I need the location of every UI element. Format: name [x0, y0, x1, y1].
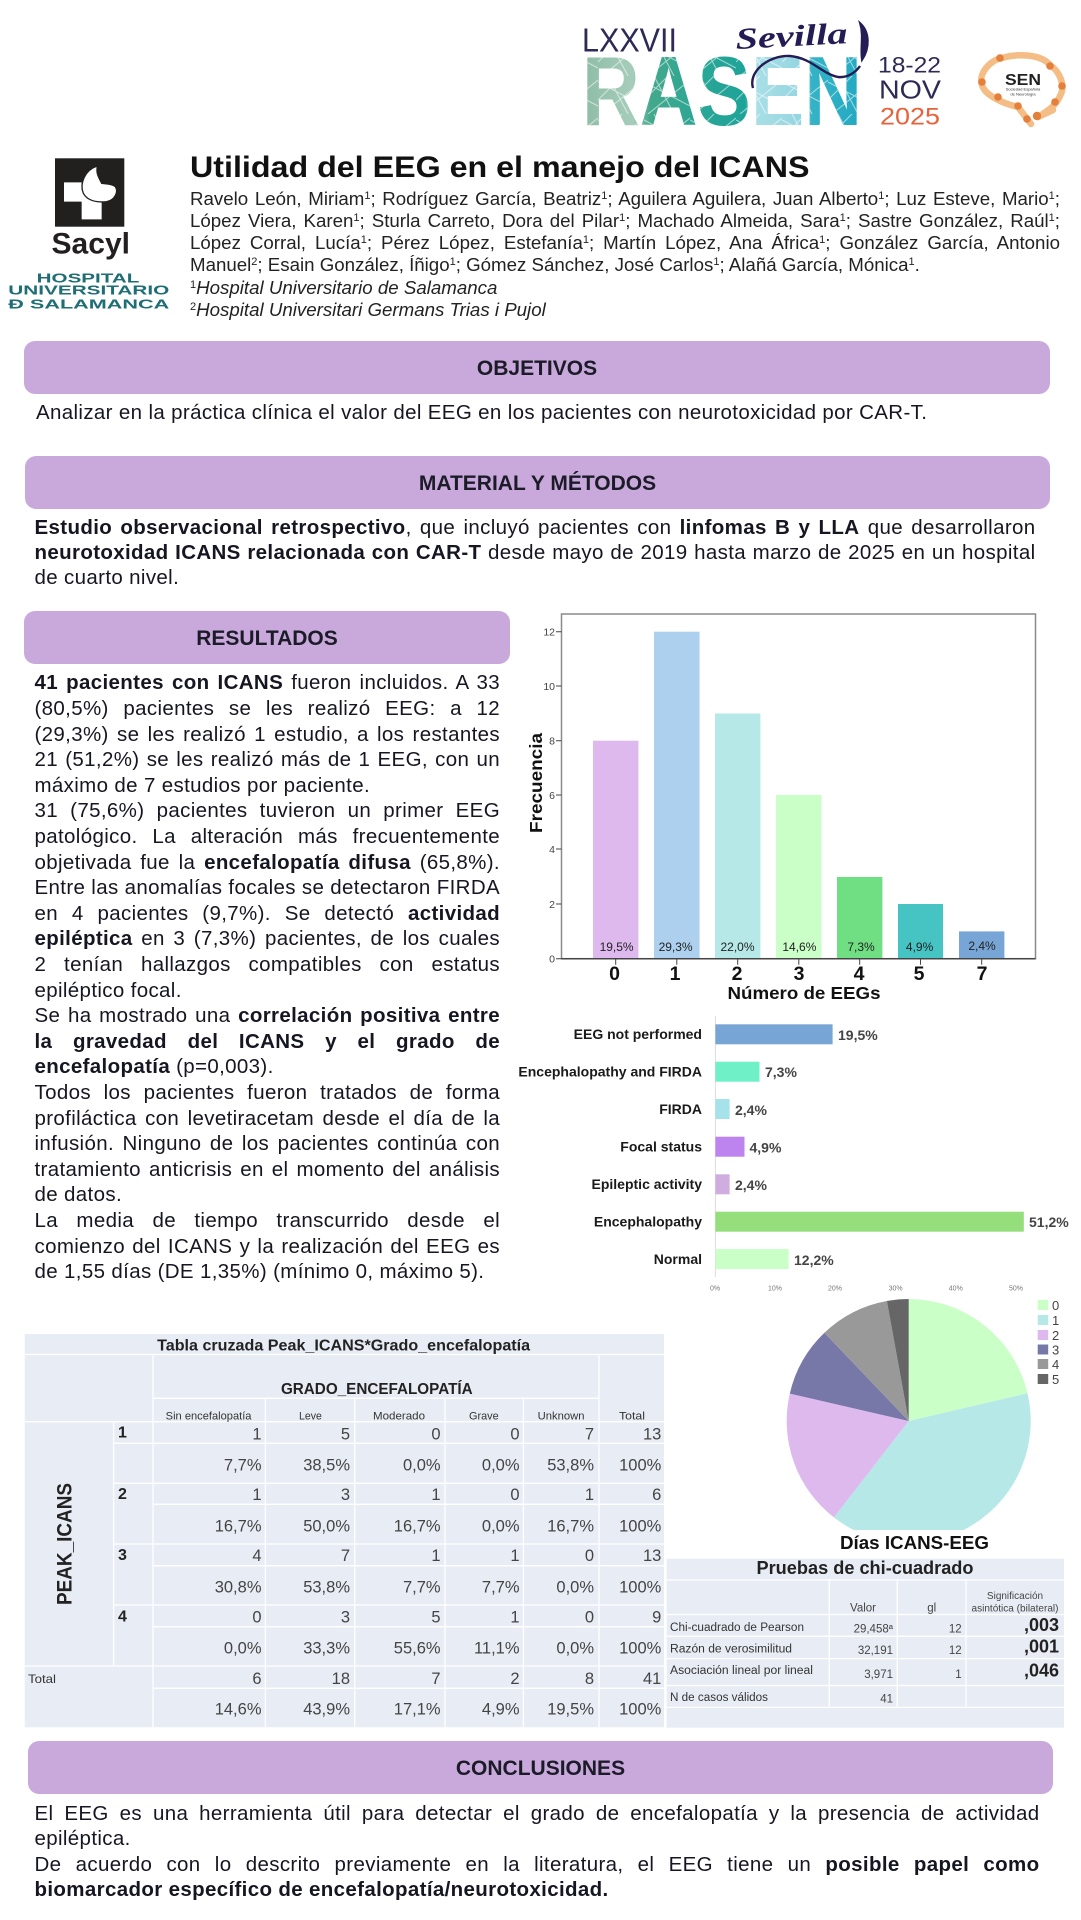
logo: Sacyl Hospital Universitario de Salamanca: HOSPITAL [37, 271, 139, 286]
authors and affiliations [190, 188, 1060, 320]
value labels: 2,4% [735, 1177, 767, 1193]
table values: 0 [510, 1425, 520, 1443]
column headers: Unknown [538, 1410, 584, 1422]
bars [593, 632, 1004, 959]
text: conclusiones: El EEG es una herramienta útil para detectar el grado de encefalopatía y la presencia de actividad [34, 1802, 1040, 1825]
x axis labels: 40% [949, 1286, 963, 1292]
table values: 18 [332, 1670, 350, 1688]
table values: 1 [431, 1547, 441, 1565]
x axis tick labels [609, 963, 987, 985]
bar chart: EEG findings [518, 1016, 1069, 1292]
x axis labels: 10% [768, 1286, 782, 1292]
logo: SEN brain: de Neurología [1010, 92, 1036, 96]
table values: 6 [652, 1486, 661, 1504]
x axis labels: 30% [889, 1286, 903, 1292]
logo: Sacyl Hospital Universitario de Salamanca [8, 158, 170, 311]
heading: conclusiones: CONCLUSIONES [456, 1757, 625, 1780]
percentage labels: 7,3% [847, 940, 875, 954]
table values: 38,5% [303, 1457, 350, 1475]
logo: SEN brain [978, 52, 1066, 128]
text: resultados: patológico. La alteración más frecuentemente [34, 825, 500, 848]
text: resultados [34, 671, 500, 1283]
text: conclusiones [34, 1802, 1040, 1901]
text: resultados: La media de tiempo transcurrido desde el [34, 1209, 500, 1232]
value labels: 7,3% [765, 1064, 797, 1080]
percentage labels: 29,3% [659, 940, 693, 954]
table: tabla cruzada Peak_ICANS por grado de encefalopatía [24, 1334, 664, 1728]
table values: 13 [643, 1547, 661, 1565]
row labels: 2 [118, 1486, 127, 1503]
heading: resultados: RESULTADOS [196, 627, 338, 650]
text: material y métodos [34, 516, 1036, 589]
text: resultados: infusión. Ninguno de los pacientes continúa con [34, 1132, 500, 1155]
y axis tick labels: 0 [549, 954, 555, 966]
text: resultados: profiláctica con levetiracetam desde el día de la [34, 1107, 500, 1130]
row labels [670, 1622, 813, 1704]
table values: 1 [510, 1609, 520, 1627]
value labels: 19,5% [838, 1027, 878, 1043]
x axis tick labels: 3 [794, 963, 805, 985]
percentage labels: 4,9% [906, 940, 934, 954]
table values: 30,8% [215, 1579, 262, 1597]
legend: 2 [1052, 1328, 1059, 1343]
table title: Tabla cruzada Peak_ICANS*Grado_encefalopatía [157, 1338, 530, 1354]
text: resultados: (80,5%) pacientes se les realizó EEG: a 12 [34, 697, 500, 720]
category labels: Normal [654, 1251, 702, 1267]
logo: LXXVII RASEN Sevilla 18-22 NOV 2025: Sevilla [735, 17, 848, 56]
row labels: 3 [118, 1547, 127, 1564]
table values: 0,0% [482, 1518, 520, 1536]
text: resultados: Se ha mostrado una correlación positiva entre [34, 1004, 500, 1027]
table values: 9 [652, 1609, 661, 1627]
column headers [166, 1410, 645, 1422]
text: resultados: de 1,55 días (DE 1,35%) (mínimo 0, máximo 5). [34, 1260, 484, 1283]
percentage labels: 2,4% [968, 939, 996, 953]
table values: 16,7% [394, 1518, 441, 1536]
values: 32,191 [858, 1645, 893, 1657]
percentage labels: 19,5% [600, 940, 634, 954]
column headers: asintótica (bilateral) [972, 1604, 1058, 1615]
legend: 1 [1052, 1313, 1059, 1328]
authors and affiliations: 1Hospital Universitario de Salamanca [190, 277, 497, 298]
pie slices [787, 1299, 1031, 1543]
column headers: gl [927, 1603, 936, 1615]
bars [715, 1024, 1024, 1269]
table values: 0,0% [556, 1579, 594, 1597]
table values: 0 [585, 1609, 594, 1627]
legend: 3 [1052, 1342, 1059, 1358]
values: 12 [949, 1645, 962, 1657]
table values: 16,7% [547, 1518, 594, 1536]
table values: 53,8% [303, 1579, 350, 1597]
table values: 6 [252, 1670, 262, 1688]
row axis label: PEAK_ICANS [54, 1483, 76, 1605]
logo: Sacyl Hospital Universitario de Salamanca: UNIVERSITARIO [8, 282, 169, 298]
value labels [735, 1027, 1069, 1268]
text: resultados: 31 (75,6%) pacientes tuvieron un primer EEG [34, 799, 500, 822]
value labels: 51,2% [1029, 1214, 1069, 1230]
authors and affiliations: López Viera, Karen1; Sturla Carreto, Dora del Pilar1; Machado Almeida, Sara1; Sastre González, Raúl1; [190, 210, 1060, 231]
text: resultados: 2 tenían hallazgos compatibles con estatus [34, 953, 500, 976]
logo: LXXVII RASEN Sevilla 18-22 NOV 2025: NOV [879, 76, 941, 104]
x axis tick labels: 4 [854, 963, 865, 985]
table values: 55,6% [394, 1639, 441, 1657]
x axis labels: 0% [710, 1286, 720, 1292]
table values: 0 [585, 1547, 594, 1565]
authors and affiliations: 2Hospital Universitari Germans Trias i Pujol [190, 299, 546, 320]
heading: resultados [24, 611, 510, 664]
table values: 2 [510, 1670, 520, 1688]
table values: 100% [619, 1639, 662, 1657]
text: resultados: (29,3%) se les realizó 1 estudio, a los restantes [34, 723, 500, 746]
table values: 11,1% [474, 1639, 520, 1657]
table values: 8 [585, 1670, 594, 1688]
y axis tick labels [543, 626, 555, 966]
y axis tick labels: 6 [549, 790, 555, 802]
heading: material y métodos: MATERIAL Y MÉTODOS [419, 472, 656, 495]
table values: 5 [431, 1609, 441, 1627]
text: resultados: epiléptico focal. [34, 979, 182, 1002]
text: resultados: en 4 pacientes (9,7%). Se detectó actividad [34, 902, 500, 925]
text: resultados: 21 (51,2%) se les realizó más de 1 EEG, con un [34, 748, 500, 771]
category labels: EEG not performed [574, 1026, 702, 1042]
x axis tick labels: 5 [914, 963, 925, 985]
table values: 100% [619, 1700, 662, 1718]
values: 41 [880, 1694, 893, 1706]
x axis tick labels: 1 [670, 963, 681, 985]
text: conclusiones: De acuerdo con lo descrito previamente en la literatura, el EEG tiene un posible papel como [34, 1853, 1040, 1876]
table values: 100% [619, 1518, 662, 1536]
text: resultados: tratamiento anticrisis en el momento del análisis [34, 1158, 500, 1181]
significance values: ,001 [1024, 1637, 1059, 1657]
column headers: Sin encefalopatía [166, 1410, 252, 1422]
legend [1038, 1298, 1059, 1387]
y axis tick labels: 2 [549, 899, 555, 911]
text: material y métodos: neurotoxidad ICANS relacionada con CAR-T desde mayo de 2019 hasta marzo de 2025 en un hospital [34, 541, 1035, 564]
table values: 0,0% [556, 1639, 594, 1657]
table values: 0 [510, 1486, 520, 1504]
column headers: Moderado [373, 1410, 425, 1422]
column headers: Significación [987, 1591, 1043, 1602]
value labels: 2,4% [735, 1102, 767, 1118]
x axis labels: 50% [1009, 1286, 1023, 1292]
table values: 16,7% [215, 1518, 262, 1536]
x axis labels [710, 1286, 1023, 1292]
authors and affiliations: López Corral, Lucía1; Pérez López, Estefanía1; Martín López, Ana África1; González García, Antonio [190, 232, 1060, 253]
text: resultados: máximo de 7 estudios por paciente. [34, 774, 370, 797]
legend: 5 [1052, 1372, 1059, 1387]
y axis title: Frecuencia [526, 733, 546, 833]
logo: Sacyl Hospital Universitario de Salamanca: Ð SALAMANCA [8, 296, 170, 311]
significance values: ,003 [1024, 1615, 1059, 1635]
table values: 7,7% [403, 1579, 441, 1597]
logo: Sacyl Hospital Universitario de Salamanca: Sacyl [52, 228, 130, 260]
row labels: Razón de verosimilitud [670, 1644, 792, 1656]
table values: 5 [341, 1425, 350, 1443]
authors and affiliations: Manuel2; Esain González, Íñigo1; Gómez Sánchez, José Carlos1; Alañá García, Mónica1. [190, 254, 920, 275]
x axis tick labels: 2 [732, 963, 743, 985]
column headers: Total [619, 1410, 645, 1422]
text: resultados: Entre las anomalías focales se detectaron FIRDA [34, 876, 500, 899]
category labels: Encephalopathy and FIRDA [518, 1064, 702, 1080]
text: resultados: objetivada fue la encefalopatía difusa (65,8%). [34, 851, 500, 874]
table: pruebas de chi-cuadrado [666, 1558, 1064, 1728]
logo: SEN brain: Sociedad Española [1006, 86, 1041, 92]
table values: 43,9% [303, 1700, 350, 1718]
text: resultados: 41 pacientes con ICANS fueron incluidos. A 33 [34, 671, 500, 694]
table values: 1 [252, 1425, 262, 1443]
text: resultados: encefalopatía (p=0,003). [34, 1055, 274, 1078]
x axis labels: 20% [828, 1286, 842, 1292]
table values: 7,7% [224, 1457, 262, 1475]
table values: 7 [341, 1547, 350, 1565]
table values: 3 [341, 1486, 350, 1504]
table values: 1 [510, 1547, 520, 1565]
column headers: Leve [299, 1410, 322, 1422]
values: 1 [955, 1669, 962, 1681]
legend: 4 [1052, 1357, 1059, 1372]
value labels: 12,2% [794, 1252, 834, 1268]
table values: 1 [585, 1486, 594, 1504]
table values: 0,0% [403, 1457, 441, 1475]
percentage labels: 14,6% [782, 940, 817, 954]
heading: material y métodos [25, 456, 1050, 509]
column headers: Valor [850, 1603, 876, 1615]
table values: 100% [619, 1457, 662, 1475]
column headers: Grave [469, 1410, 499, 1422]
x axis title: Número de EEGs [728, 983, 881, 1003]
legend: 0 [1052, 1298, 1059, 1313]
table values: 19,5% [547, 1700, 594, 1718]
values: 12 [949, 1624, 962, 1636]
table values: 0,0% [224, 1639, 262, 1657]
logo: LXXVII RASEN Sevilla 18-22 NOV 2025: 2025 [880, 103, 940, 130]
x axis tick labels: 7 [977, 963, 987, 985]
row labels [118, 1425, 127, 1626]
row labels: Chi-cuadrado de Pearson [670, 1622, 804, 1634]
y axis tick labels: 10 [543, 681, 555, 693]
values [854, 1624, 962, 1706]
heading: objetivos: OBJETIVOS [477, 357, 597, 380]
table values: 4,9% [482, 1700, 520, 1718]
values: 3,971 [864, 1669, 893, 1681]
percentage labels: 22,0% [720, 940, 755, 954]
text: conclusiones: biomarcador específico de encefalopatía/neurotoxicidad. [34, 1878, 609, 1901]
table values: 0 [252, 1609, 262, 1627]
heading: objetivos [24, 341, 1050, 394]
table values: 100% [619, 1579, 662, 1597]
text: resultados: de datos. [34, 1183, 122, 1206]
text: resultados: epiléptica en 3 (7,3%) pacientes, de los cuales [34, 927, 500, 950]
table values [215, 1425, 662, 1718]
logo: LXXVII RASEN Sevilla 18-22 NOV 2025: 18-22 [878, 53, 941, 78]
title: Utilidad del EEG en el manejo del ICANS [190, 151, 809, 184]
text: conclusiones: epiléptica. [34, 1827, 131, 1850]
category labels: FIRDA [659, 1101, 702, 1117]
table values: 7 [585, 1425, 594, 1443]
category labels: Encephalopathy [594, 1214, 702, 1230]
significance values: ,046 [1024, 1661, 1059, 1681]
text: objetivos: Analizar en la práctica clínica el valor del EEG en los pacientes con neurotoxicidad por CAR-T. [36, 401, 927, 424]
table values: 7 [431, 1670, 441, 1688]
table values: 7,7% [482, 1579, 520, 1597]
y axis tick labels: 8 [549, 736, 555, 748]
x axis tick labels: 0 [609, 963, 620, 985]
bar chart: número de EEGs [526, 613, 1036, 1003]
row labels: 4 [118, 1609, 127, 1626]
table values: 13 [643, 1425, 661, 1443]
table values: 0 [431, 1425, 441, 1443]
table values: 1 [431, 1486, 441, 1504]
percentage labels [600, 939, 996, 954]
table title: Pruebas de chi-cuadrado [756, 1558, 974, 1578]
value labels: 4,9% [750, 1140, 782, 1156]
values: 29,458ª [854, 1624, 894, 1636]
table values: 3 [341, 1609, 350, 1627]
total label: Total [28, 1672, 56, 1686]
pie chart: días ICANS-EEG [786, 1298, 1059, 1553]
column headers [850, 1591, 1058, 1615]
pie title: Días ICANS-EEG [840, 1532, 989, 1553]
logo: SEN brain: SEN [1005, 72, 1041, 89]
category labels: Epileptic activity [592, 1176, 702, 1192]
row labels: N de casos válidos [670, 1692, 768, 1704]
significance values [1024, 1615, 1059, 1681]
table values: 0,0% [482, 1457, 520, 1475]
row labels: Asociación lineal por lineal [670, 1665, 813, 1677]
table values: 4 [252, 1547, 262, 1565]
y axis tick labels: 4 [549, 844, 555, 856]
authors and affiliations: Ravelo León, Miriam1; Rodríguez García, Beatriz1; Aguilera Aguilera, Juan Alberto1; Luz Esteve, Mario1; [190, 188, 1060, 209]
text: material y métodos: Estudio observacional retrospectivo, que incluyó pacientes con linfomas B y LLA que desarrollaron [34, 516, 1036, 539]
table values: 41 [643, 1670, 661, 1688]
text: resultados: comienzo del ICANS y la realización del EEG es [34, 1235, 500, 1258]
text: resultados: la gravedad del ICANS y el grado de [34, 1030, 500, 1053]
text: resultados: Todos los pacientes fueron tratados de forma [34, 1081, 500, 1104]
heading: conclusiones [28, 1741, 1053, 1794]
row labels: 1 [118, 1425, 127, 1442]
category labels [518, 1026, 702, 1267]
table values: 1 [252, 1486, 262, 1504]
table values: 17,1% [394, 1700, 441, 1718]
table values: 50,0% [303, 1518, 350, 1536]
y axis tick labels: 12 [543, 626, 555, 638]
table values: 53,8% [547, 1457, 594, 1475]
category labels: Focal status [620, 1138, 702, 1154]
table values: 33,3% [303, 1639, 350, 1657]
logo: LXXVII RASEN Sevilla 18-22 NOV 2025: LXXVII [582, 22, 677, 58]
text: material y métodos: de cuarto nivel. [34, 566, 179, 589]
column group heading: GRADO_ENCEFALOPATÍA [281, 1381, 473, 1398]
table values: 14,6% [215, 1700, 262, 1718]
